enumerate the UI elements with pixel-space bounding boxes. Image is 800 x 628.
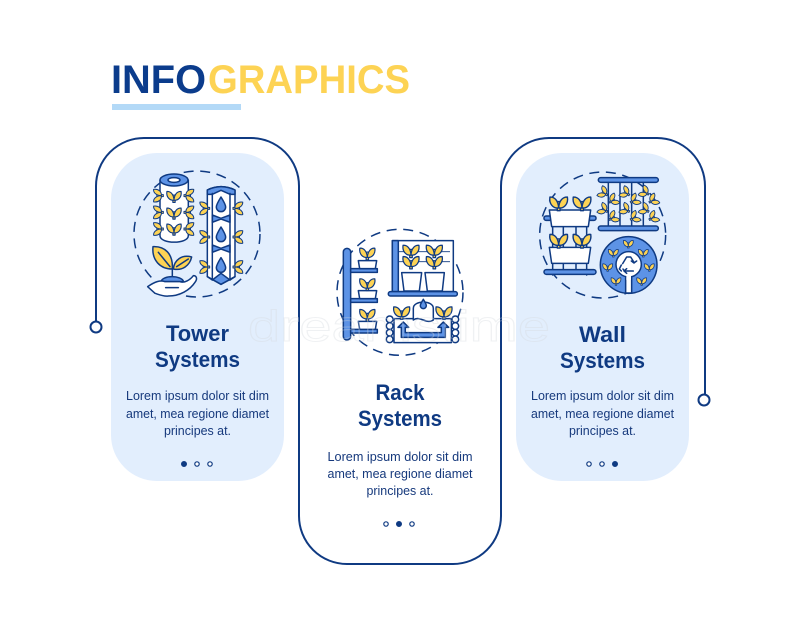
pagination dots: tower (182, 462, 212, 466)
text: tower description: amet, mea regione diamet (126, 407, 270, 421)
heading: wall systems: Systems (560, 348, 645, 373)
pagination dots: wall (587, 462, 617, 466)
text: wall description (531, 389, 675, 438)
title (111, 58, 410, 102)
text: tower description: principes at. (164, 424, 231, 438)
text: tower description (126, 389, 270, 438)
text: rack description (328, 450, 473, 498)
panel: tower background (111, 153, 284, 481)
heading: rack systems: Rack (376, 380, 425, 405)
title underline (112, 104, 241, 110)
watermark: dreamstime (248, 302, 550, 351)
heading: wall systems: Wall (579, 322, 626, 347)
panel: wall background (516, 153, 689, 481)
text: rack description: principes at. (366, 484, 434, 498)
pagination dots: rack (384, 522, 414, 526)
heading: tower systems: Tower (166, 321, 229, 346)
heading: wall systems (560, 322, 645, 373)
text: tower description: Lorem ipsum dolor sit dim (126, 389, 269, 403)
heading: rack systems: Systems (358, 406, 442, 431)
icon: tower systems (134, 171, 260, 297)
heading: rack systems (358, 380, 442, 431)
title: GRAPHICS (208, 58, 410, 102)
text: rack description: Lorem ipsum dolor sit dim (328, 450, 472, 464)
heading: tower systems: Systems (155, 347, 240, 372)
connector outline (90, 138, 710, 564)
text: rack description: amet, mea regione diamet (328, 467, 473, 481)
title: INFO (111, 58, 206, 102)
text: wall description: amet, mea regione diamet (531, 407, 675, 421)
heading: tower systems (155, 321, 240, 372)
icon: rack systems (337, 229, 463, 355)
icon: wall systems (540, 172, 666, 298)
text: wall description: Lorem ipsum dolor sit dim (531, 389, 674, 403)
text: wall description: principes at. (569, 424, 636, 438)
